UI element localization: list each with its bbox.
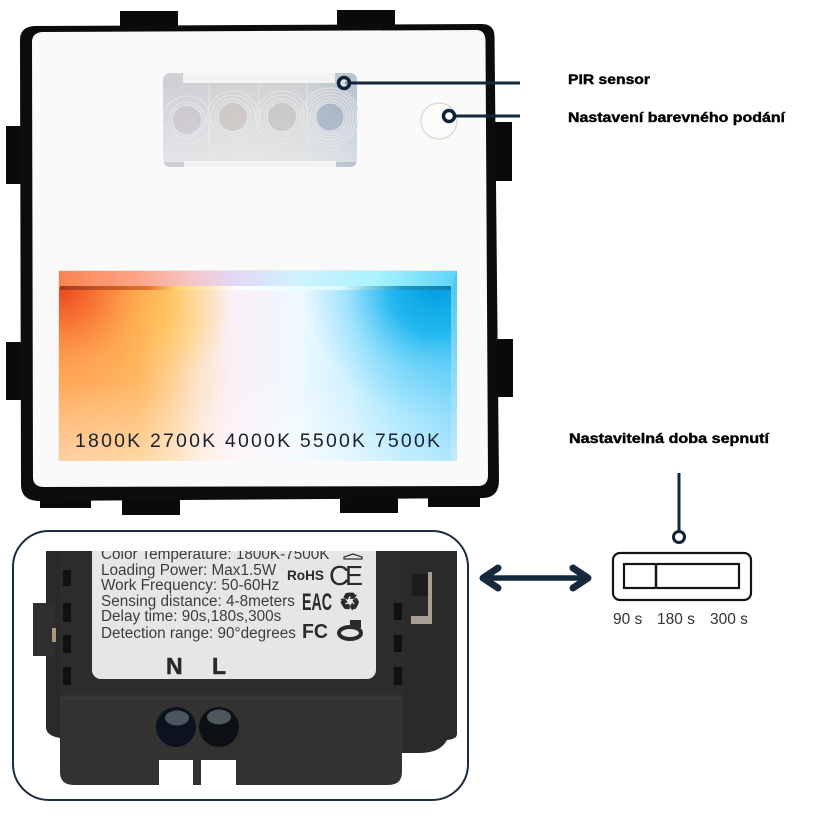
colour rendering button	[421, 103, 457, 139]
device: front view of sensor	[6, 10, 513, 515]
DIP time switch	[410, 572, 432, 624]
device back photo	[33, 540, 457, 786]
certification marks	[287, 554, 363, 643]
label: adjustable on-time: Nastavitelná doba sepnutí	[569, 431, 770, 446]
certification marks: E	[345, 560, 363, 591]
PIR sensor window	[163, 73, 359, 167]
spec text: Color Temperature: 1800K-7500K	[101, 546, 330, 563]
label: colour rendering: Nastavení barevného podání	[568, 110, 786, 125]
switch time labels: 90 s	[613, 611, 643, 628]
spec text: Sensing distance: 4-8meters	[101, 593, 295, 610]
spec text: Delay time: 90s,180s,300s	[101, 608, 282, 625]
callout line: colour rendering	[444, 110, 520, 122]
spec text: Detection range: 90°degrees	[101, 625, 296, 642]
callout line: PIR sensor	[338, 78, 520, 88]
device frame	[20, 24, 499, 501]
switch time labels: 180 s	[657, 611, 695, 628]
colour temperature scale: 1800K 2700K 4000K 5500K 7500K	[75, 430, 440, 452]
certification marks: RoHS	[287, 567, 324, 583]
device back photo: L	[212, 653, 226, 679]
panel outline	[13, 531, 468, 800]
wire notches	[159, 760, 193, 786]
certification marks: C	[329, 560, 349, 591]
certification marks: FC	[302, 621, 328, 643]
terminal screws	[156, 707, 239, 747]
callout line: time switch	[674, 473, 684, 542]
colour temperature light window	[58, 270, 457, 461]
label: PIR sensor: PIR sensor	[568, 72, 651, 87]
time switch diagram	[613, 553, 751, 600]
white face plate	[32, 30, 488, 487]
back plate	[46, 551, 457, 753]
spec text	[101, 546, 330, 642]
certification marks: ♻	[339, 589, 361, 616]
certification marks: EAC	[302, 589, 332, 616]
panel: back of device	[13, 531, 468, 800]
spec text: Loading Power: Max1.5W	[101, 562, 277, 579]
switch time labels	[613, 611, 748, 628]
vent slots	[63, 570, 402, 685]
mounting tabs	[6, 10, 513, 515]
spec text: Work Frequency: 50-60Hz	[101, 577, 279, 594]
double arrow	[483, 568, 588, 588]
body	[60, 695, 402, 785]
rating label	[92, 540, 376, 679]
switch time labels: 300 s	[710, 611, 748, 628]
terminal labels: N	[166, 653, 183, 679]
